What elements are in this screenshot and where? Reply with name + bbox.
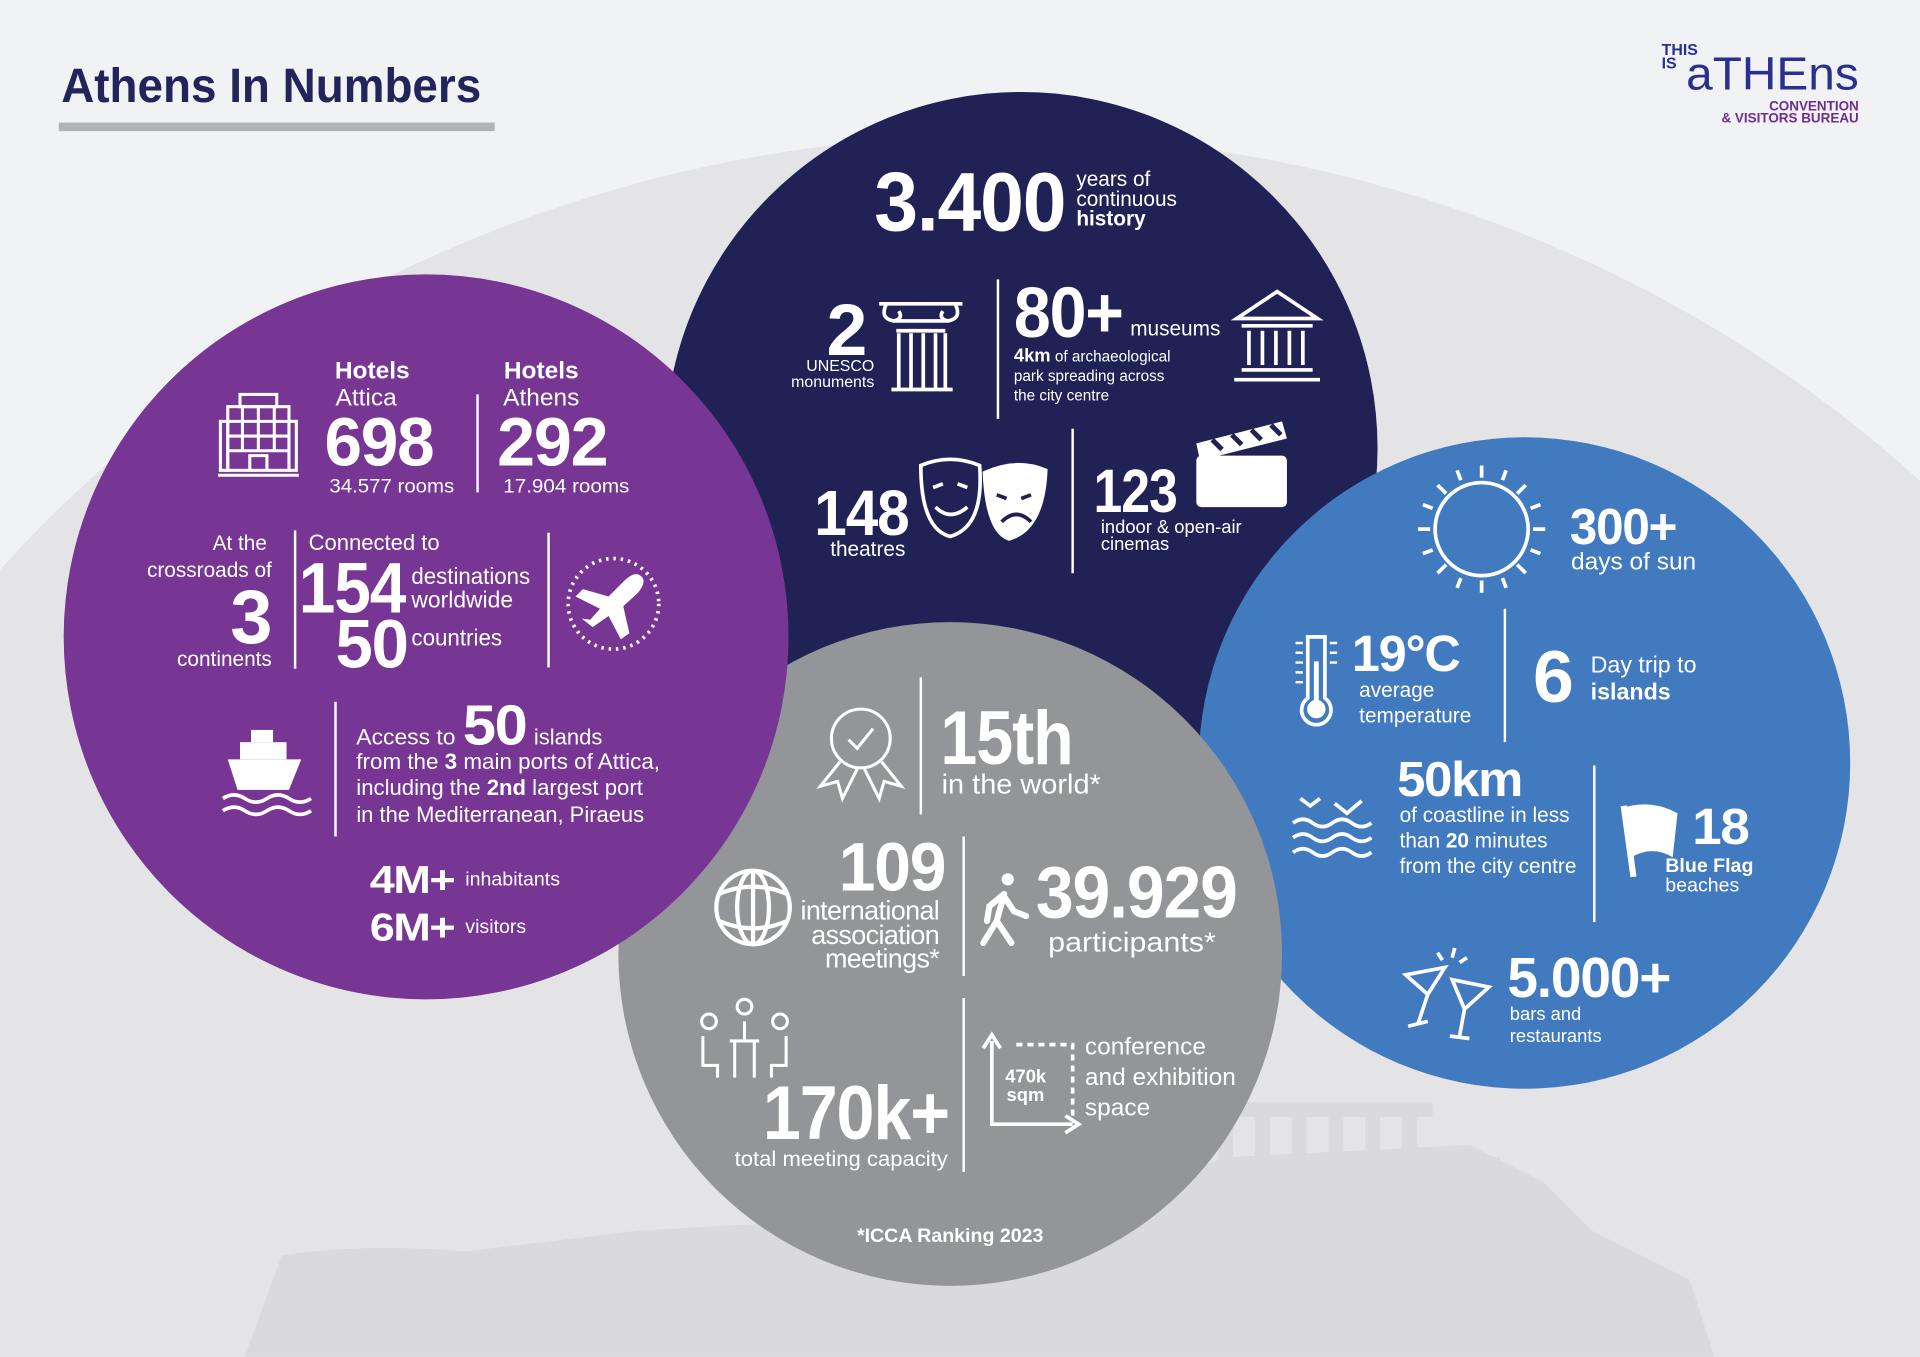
stat: museums: museums (1130, 318, 1220, 341)
stat: exhibition space: conference (1085, 1033, 1206, 1060)
stat: meetings: meetings* (825, 943, 940, 973)
stat: destinations: worldwide (410, 586, 513, 612)
stat: population: inhabitants (465, 868, 560, 890)
stat: population: 4M+ (370, 859, 455, 902)
logo: & VISITORS BUREAU (1721, 111, 1859, 126)
stat: coastline: of coastline in less (1400, 804, 1570, 827)
stat: coastline: than 20 minutes (1400, 829, 1548, 852)
logo (1662, 42, 1859, 126)
stat: days of sun (1570, 497, 1696, 576)
icon: thermometer (1296, 637, 1337, 725)
stat: participants: 39.929 (1036, 850, 1237, 933)
stat: islands: Access to (356, 725, 456, 750)
stat: blue flag: beaches (1665, 875, 1740, 897)
circle: navy culture (665, 92, 1378, 805)
stat: 3400 years: history (1076, 207, 1146, 230)
stat: islands: in the Mediterranean, Piraeus (356, 802, 644, 827)
stat: blue flag (1665, 797, 1753, 897)
acropolis silhouette (245, 1102, 1714, 1357)
icon: museum (1234, 292, 1320, 380)
stat: hotels athens: Athens (503, 384, 579, 411)
icon: ship (223, 730, 311, 814)
stat: day trips (1533, 635, 1697, 718)
logo: IS (1662, 56, 1677, 73)
stat: hotels athens: 292 (497, 403, 607, 480)
stat: cinemas (1093, 457, 1242, 554)
stat: temperature: average (1359, 679, 1434, 702)
stat: museums (1014, 274, 1220, 405)
stat: day trips: 6 (1533, 635, 1573, 718)
stat: continents: At the (213, 532, 267, 555)
stat: cinemas: cinemas (1101, 533, 1169, 554)
stat: meetings: international (800, 896, 939, 926)
stat: continents (147, 532, 272, 671)
footnote: *ICCA Ranking 2023 (857, 1225, 1044, 1247)
stat: destinations: countries (411, 624, 502, 650)
stat: temperature: 19°C (1352, 624, 1460, 682)
icon: area arrows: 470k (1005, 1066, 1047, 1087)
icon: cocktails (1406, 948, 1489, 1038)
stat: day trips: islands (1591, 678, 1671, 704)
stat: meetings (800, 828, 945, 973)
stat: islands: 50 (463, 694, 527, 757)
icon: area arrows (983, 1035, 1079, 1133)
stat: exhibition space (1085, 1033, 1236, 1122)
icon: walker (983, 873, 1026, 943)
stat: coastline (1397, 753, 1576, 878)
icon: flag (1621, 804, 1678, 877)
stat: hotels attica: 698 (324, 403, 434, 480)
stat: hotels athens: Hotels (504, 358, 579, 385)
icon: clapboard (1196, 421, 1287, 507)
stat: population: visitors (465, 916, 526, 938)
stat: days of sun: days of sun (1571, 549, 1696, 576)
stat: capacity: 170k+ (763, 1071, 949, 1156)
logo: CONVENTION (1769, 98, 1859, 113)
stat: continents: crossroads of (147, 559, 272, 582)
stat: 2 unesco: 2 (827, 288, 866, 371)
stat: bars: bars and (1510, 1003, 1581, 1024)
icon: area arrows: sqm (1007, 1084, 1044, 1105)
circle: purple travel (64, 274, 789, 999)
stat: theatres: 148 (814, 478, 909, 549)
stat: hotels athens (497, 358, 630, 497)
stat: 3400 years (874, 155, 1177, 248)
stat: islands (356, 694, 660, 827)
stat: 2 unesco: monuments (791, 374, 874, 391)
stat: ranking: in the world* (942, 769, 1101, 800)
icon: sun (1418, 465, 1545, 593)
stat: 2 unesco (791, 288, 874, 391)
stat: population: 6M+ (370, 907, 455, 950)
stat: coastline: from the city centre (1400, 855, 1576, 878)
stat: 3400 years: 3.400 (874, 155, 1065, 248)
stat: destinations: destinations (411, 563, 530, 589)
stat: museums: park spreading across (1014, 368, 1165, 385)
stat: destinations: Connected to (309, 530, 440, 555)
stat: destinations: 50 (336, 605, 408, 682)
stat: days of sun: 300+ (1570, 497, 1676, 555)
stat: blue flag: Blue Flag (1665, 855, 1753, 877)
icon: plane (568, 558, 659, 649)
stat: capacity: total meeting capacity (735, 1148, 948, 1171)
stat: hotels attica (324, 358, 455, 497)
stat: exhibition space: and exhibition (1085, 1064, 1236, 1091)
stat: coastline: 50km (1397, 753, 1522, 807)
stat: destinations (299, 530, 530, 682)
circle: gray meetings (618, 622, 1282, 1286)
stat: day trips: Day trip to (1591, 651, 1697, 677)
stat: temperature (1352, 624, 1471, 728)
stat: islands: islands (534, 725, 602, 750)
stat: participants: participants* (1048, 927, 1216, 958)
stat: destinations: 154 (299, 549, 407, 628)
stat: cinemas: indoor & open-air (1101, 516, 1242, 537)
stat: bars (1507, 946, 1670, 1046)
stat: theatres: theatres (830, 538, 905, 561)
logo: THIS (1662, 42, 1698, 59)
title: Athens In Numbers (61, 60, 481, 113)
stat: temperature: temperature (1359, 705, 1471, 728)
stat: 3400 years: years of (1076, 168, 1151, 191)
icon: sea (1293, 798, 1371, 856)
stat: hotels athens: 17.904 rooms (503, 475, 630, 497)
stat: population (370, 859, 560, 950)
stat: museums: 4km of archaeological (1014, 344, 1171, 365)
logo: aTHEns (1686, 48, 1859, 100)
stat: cinemas: 123 (1093, 457, 1177, 525)
stat: continents: continents (177, 648, 272, 671)
icon: badge (820, 709, 901, 798)
stat: exhibition space: space (1085, 1095, 1150, 1122)
circle: blue leisure (1199, 437, 1850, 1089)
stat: ranking: 15th (940, 696, 1073, 781)
stat: bars: 5.000+ (1507, 946, 1670, 1009)
stat: museums: the city centre (1014, 388, 1109, 405)
stat: hotels attica: Hotels (335, 358, 410, 385)
stat: capacity (735, 1071, 949, 1171)
stat: 2 unesco: UNESCO (806, 358, 874, 375)
stat: blue flag: 18 (1692, 797, 1749, 855)
stat: hotels attica: Attica (336, 384, 397, 411)
icon: globe (716, 871, 790, 944)
icon: meeting table (702, 999, 787, 1078)
stat: islands: including the 2nd largest port (356, 775, 643, 800)
stat: islands: from the 3 main ports of Attica, (356, 749, 660, 774)
stat: continents: 3 (230, 575, 271, 660)
icon: masks (921, 459, 1046, 539)
stat: bars: restaurants (1510, 1025, 1602, 1046)
stat: meetings: association (811, 920, 939, 950)
icon: hotel building (218, 394, 299, 475)
stat: 3400 years: continuous (1076, 188, 1177, 211)
stat: hotels attica: 34.577 rooms (329, 475, 455, 497)
stat: museums: 80+ (1014, 274, 1123, 353)
stat: meetings: 109 (839, 828, 945, 905)
icon: ionic column (879, 304, 962, 390)
